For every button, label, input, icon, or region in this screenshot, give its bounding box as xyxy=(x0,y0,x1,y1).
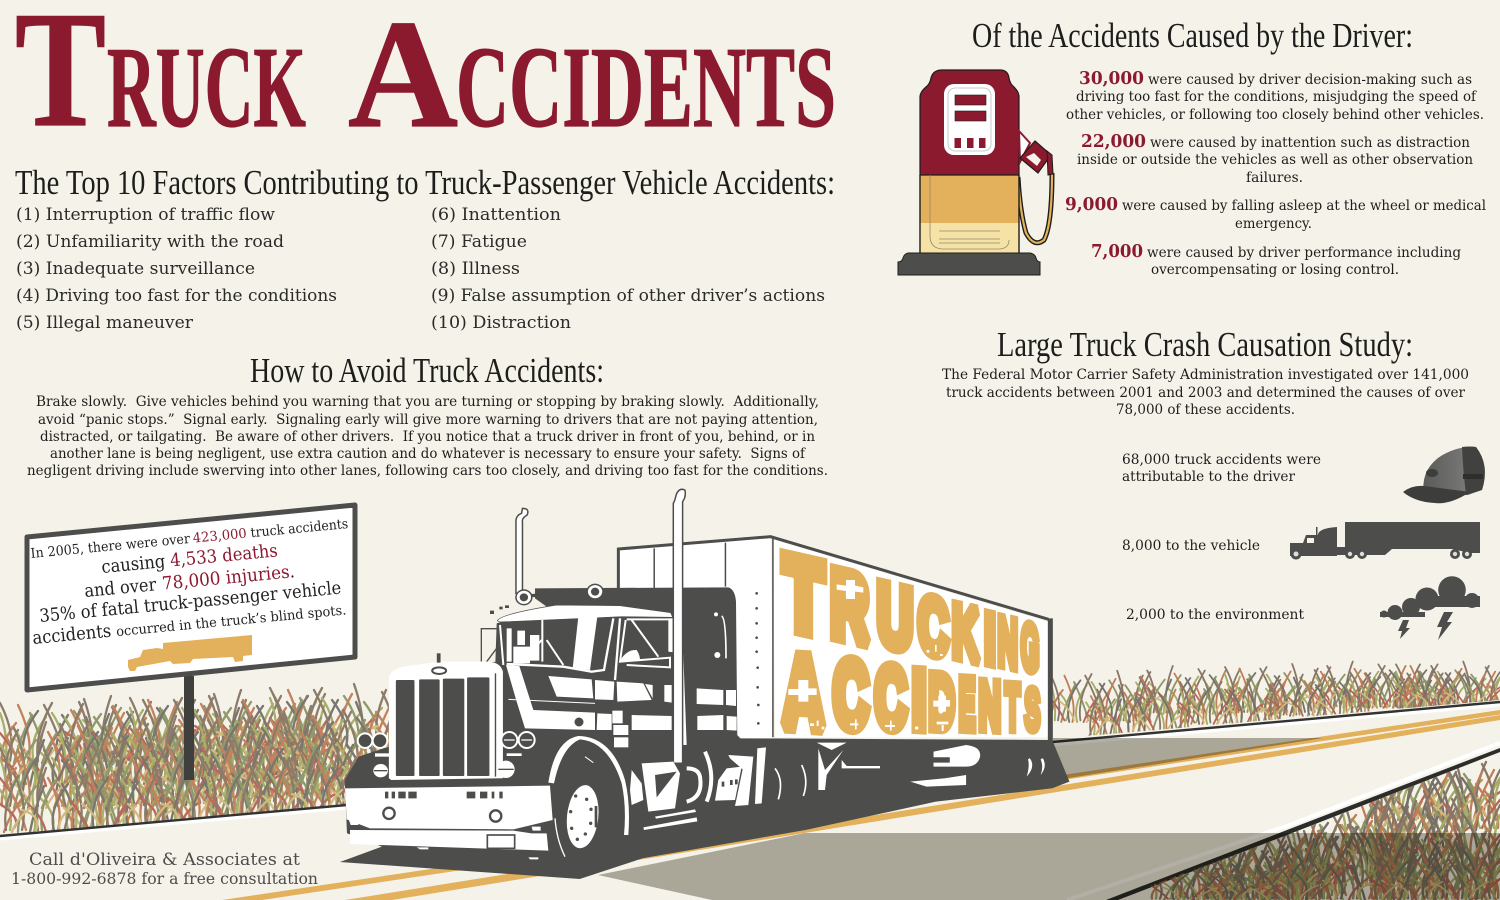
shadow: road behind truck xyxy=(1053,738,1323,782)
trailer lettering: I xyxy=(912,655,926,746)
trailer lettering xyxy=(783,534,1040,750)
factor list right: (7) Fatigue xyxy=(431,232,527,252)
stat: 9,000: emergency. xyxy=(1235,216,1312,232)
billboard text: . xyxy=(289,561,296,583)
call to action: Call d'Oliveira & Associates at xyxy=(29,850,300,870)
mirror tube xyxy=(481,629,497,662)
billboard text: In 2005, there were over xyxy=(30,531,191,562)
cab roof xyxy=(497,605,673,622)
title xyxy=(15,0,836,161)
trailer lettering: G xyxy=(1021,611,1039,686)
title: CCIDENTS xyxy=(456,24,836,152)
trailer lettering: N xyxy=(979,668,1001,745)
stat: 30,000: were caused by driver decision-making such as xyxy=(1148,72,1472,88)
paragraph: how to avoid: negligent driving include swerving into other lanes, following cars too closely, and driving too fast for the conditions. xyxy=(27,463,828,479)
headlights and fender xyxy=(497,732,629,835)
factor list left: (4) Driving too fast for the conditions xyxy=(16,286,337,306)
trailer lettering: C xyxy=(918,580,948,674)
marker lights xyxy=(516,584,603,605)
stat: 22,000 xyxy=(1077,131,1473,186)
trailer lettering: D xyxy=(929,658,955,745)
paragraph: how to avoid: another lane is being negligent, use extra caution and do whatever is necessary to ensure your safety. Signs of xyxy=(50,446,807,462)
trailer lettering: C xyxy=(875,648,907,747)
grass: left field xyxy=(0,684,415,832)
factor list left: (1) Interruption of traffic flow xyxy=(16,205,275,225)
heading: top 10 factors: The Top 10 Factors Contributing to Truck-Passenger Vehicle Accidents: xyxy=(15,163,835,202)
grass: right lower field xyxy=(1150,756,1500,900)
billboard text: truck accidents xyxy=(250,516,349,541)
paragraph: causation study xyxy=(942,367,1469,418)
side window xyxy=(500,620,563,665)
trailer lettering: K xyxy=(952,589,979,678)
stat: 9,000: 9,000 xyxy=(1065,194,1118,215)
icon: trucker cap xyxy=(1403,446,1485,503)
trailer front xyxy=(618,538,774,738)
text: driver attribution xyxy=(1122,452,1321,485)
stat: 22,000: were caused by inattention such as distraction xyxy=(1150,135,1470,151)
windshield highlight xyxy=(573,617,597,670)
chassis details xyxy=(630,743,880,830)
cab xyxy=(481,587,760,803)
paragraph: how to avoid: distracted, or tailgating. Be aware of other drivers. If you notice that a truck driver in front of you, behind, or in xyxy=(40,429,815,445)
billboard text: 78,000 injuries xyxy=(161,562,291,595)
trailer lettering: I xyxy=(984,599,995,680)
stack front xyxy=(673,489,685,763)
stack rear xyxy=(516,508,528,593)
stat: 30,000: driving too fast for the conditions, misjudging the speed of xyxy=(1076,89,1478,105)
panel: accidents caused by the driver xyxy=(898,16,1486,278)
billboard text: 35% of fatal truck-passenger vehicle xyxy=(38,578,342,627)
truck shadow and dark body xyxy=(340,662,1069,879)
trailer lettering: T xyxy=(784,534,823,656)
trailer lettering: S xyxy=(1024,678,1040,743)
text: environment attribution: 2,000 to the environment xyxy=(1126,607,1304,623)
stat: 22,000: failures. xyxy=(1246,170,1303,186)
panel: top 10 factors xyxy=(15,163,835,333)
stat: 30,000 xyxy=(1066,68,1484,123)
paragraph: how to avoid: Brake slowly. Give vehicles behind you warning that you are turning or stopping by braking slowly. Additionally, xyxy=(36,394,819,410)
paragraph: causation study: 78,000 of these accidents. xyxy=(1116,402,1295,418)
paragraph: causation study: The Federal Motor Carrier Safety Administration investigated over 141,000 xyxy=(942,367,1469,383)
under-bumper marks xyxy=(417,847,538,859)
panel: how to avoid xyxy=(27,351,828,479)
icon: billboard truck xyxy=(128,635,252,671)
roof clearance lights xyxy=(490,605,509,614)
stat: 30,000: other vehicles, or following too closely behind other vehicles. xyxy=(1066,107,1484,123)
billboard text: causing xyxy=(100,551,166,578)
call to action: 1-800-992-6878 for a free consultation xyxy=(11,870,318,888)
trailer lettering: C xyxy=(833,642,868,748)
trailer front rivets xyxy=(755,592,760,725)
stat: 22,000: inside or outside the vehicles as well as other observation xyxy=(1077,152,1473,168)
trailer lettering: E xyxy=(959,664,976,745)
hood and grille xyxy=(389,653,503,780)
factor list left: (5) Illegal maneuver xyxy=(16,313,194,333)
stat: 22,000: 22,000 xyxy=(1081,131,1146,152)
title: RUCK xyxy=(107,24,306,152)
door window xyxy=(620,618,682,667)
front wheel xyxy=(564,784,602,850)
billboard text: 423,000 xyxy=(192,526,247,547)
heading: causation study: Large Truck Crash Causation Study: xyxy=(997,325,1413,364)
billboard text: accidents xyxy=(31,621,112,649)
trailer lettering: U xyxy=(877,565,913,669)
icon: fuel pump xyxy=(898,70,1053,275)
left headlights and bumper xyxy=(345,733,602,859)
billboard text: 4,533 deaths xyxy=(169,540,279,571)
stat: 7,000: overcompensating or losing control. xyxy=(1151,262,1399,278)
shadow: road foreground xyxy=(598,833,1500,900)
paragraph: how to avoid xyxy=(27,394,828,479)
text: driver attribution: 68,000 truck accidents were xyxy=(1122,452,1321,468)
call to action xyxy=(11,850,318,888)
trailer side xyxy=(773,539,1050,737)
billboard post xyxy=(184,676,194,780)
factor list right: (8) Illness xyxy=(431,259,520,279)
trailer lettering: T xyxy=(1005,672,1020,744)
stat: 30,000: 30,000 xyxy=(1079,68,1144,89)
paragraph: how to avoid: avoid “panic stops.” Signal early. Signaling early will give more warning to drivers that are not paying attention, xyxy=(38,412,818,428)
icon: storm clouds xyxy=(1380,576,1480,640)
stat: 9,000 xyxy=(1065,194,1486,232)
rear chassis details xyxy=(910,745,1045,787)
bumper xyxy=(345,786,553,829)
trailer lettering: R xyxy=(831,551,869,664)
billboard text xyxy=(30,516,349,649)
factor list left: (2) Unfamiliarity with the road xyxy=(16,232,284,252)
billboard xyxy=(27,505,355,780)
factor list right: (9) False assumption of other driver’s actions xyxy=(431,286,825,306)
factor list right xyxy=(431,205,825,333)
panel: crash causation study xyxy=(942,325,1485,640)
factor list right: (6) Inattention xyxy=(431,205,561,225)
stat: 7,000: 7,000 xyxy=(1091,241,1143,262)
road: edges and centre lines xyxy=(0,702,1500,900)
grass: right upper field xyxy=(1050,662,1500,736)
truck illustration xyxy=(340,489,1069,879)
trailer lettering: N xyxy=(998,604,1018,684)
text: driver attribution: attributable to the driver xyxy=(1122,469,1295,485)
factor list left xyxy=(16,205,337,333)
stat: 9,000: were caused by falling asleep at the wheel or medical xyxy=(1122,198,1486,214)
paragraph: causation study: truck accidents between 2001 and 2003 and determined the causes of over xyxy=(946,385,1465,401)
heading: how to avoid: How to Avoid Truck Accidents: xyxy=(250,351,604,390)
billboard text: occurred in the truck’s blind spots. xyxy=(115,602,347,640)
factor list left: (3) Inadequate surveillance xyxy=(16,259,255,279)
billboard panel xyxy=(27,505,355,690)
billboard text: and over xyxy=(83,574,157,602)
truck body and trailer xyxy=(340,537,1069,879)
sleeper details xyxy=(722,616,726,658)
text: vehicle attribution: 8,000 to the vehicle xyxy=(1122,538,1260,554)
stat: 7,000 xyxy=(1091,241,1461,278)
icon: semi truck xyxy=(1290,522,1480,560)
stat: 7,000: were caused by driver performance including xyxy=(1147,245,1461,261)
factor list right: (10) Distraction xyxy=(431,313,571,333)
cab stripes xyxy=(506,655,737,747)
trailer lettering: A xyxy=(783,636,824,750)
